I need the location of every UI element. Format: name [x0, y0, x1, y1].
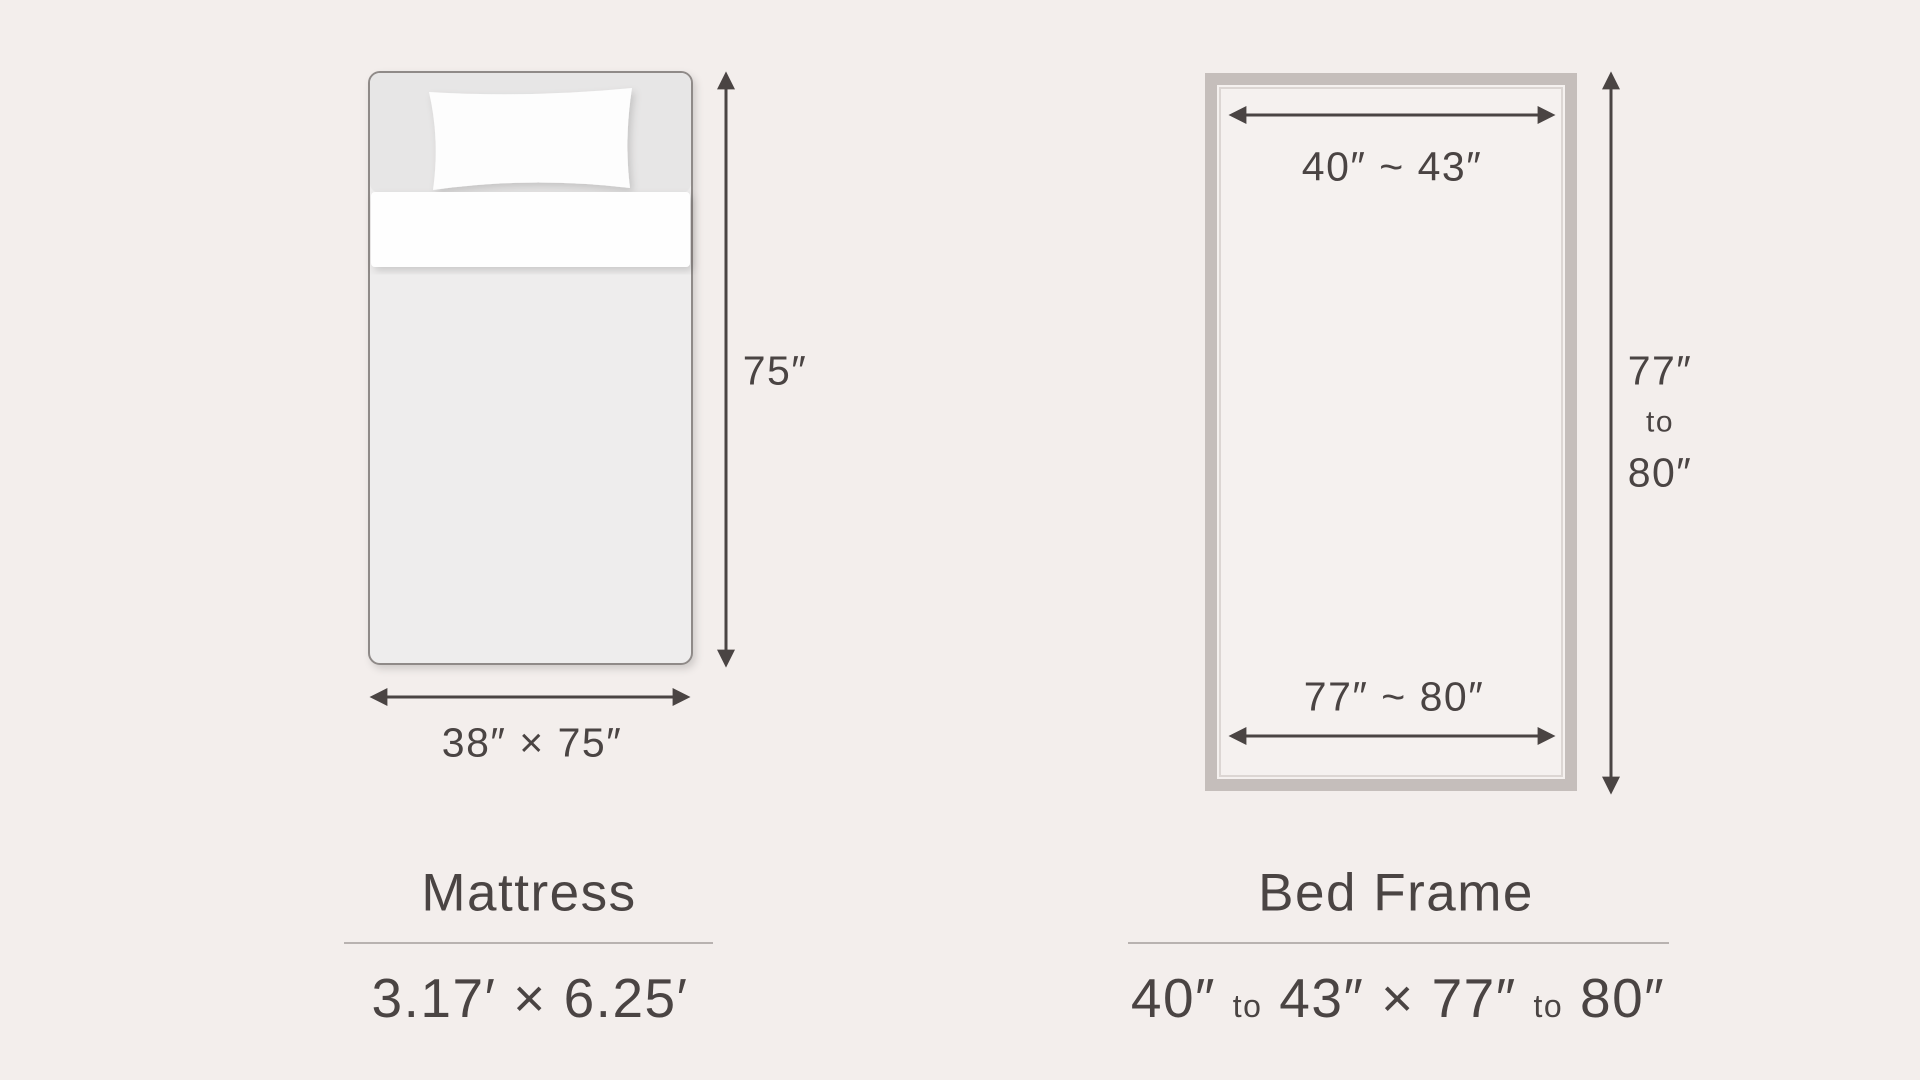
value: mattress feet: 3.17′ × 6.25′ — [372, 967, 688, 1029]
arrow: frame width bottom — [1232, 734, 1552, 738]
label: mattress size: 38″ × 75″ — [442, 720, 622, 766]
label: frame length: 80″ — [1628, 450, 1692, 496]
blanket fold — [371, 192, 690, 267]
heading: Bed Frame: Bed Frame — [1258, 864, 1534, 922]
label: frame length: 77″ — [1628, 347, 1692, 393]
label: frame length — [1628, 347, 1692, 496]
pillow — [429, 88, 632, 190]
label: frame width top: 40″ ~ 43″ — [1302, 144, 1482, 190]
value: frame size: 40″ to 43″ × 77″ to 80″ — [1131, 967, 1665, 1029]
arrow: frame length — [1610, 75, 1612, 791]
label: frame width bottom: 77″ ~ 80″ — [1304, 674, 1484, 720]
mattress — [369, 72, 692, 664]
label: frame length: to — [1646, 406, 1674, 438]
label: 75: 75″ — [743, 348, 807, 394]
arrow: mattress width — [373, 696, 687, 698]
arrow: frame width top — [1232, 114, 1552, 116]
heading: Mattress: Mattress — [421, 864, 637, 922]
bed frame — [1211, 79, 1571, 785]
arrow: mattress length — [724, 75, 728, 664]
